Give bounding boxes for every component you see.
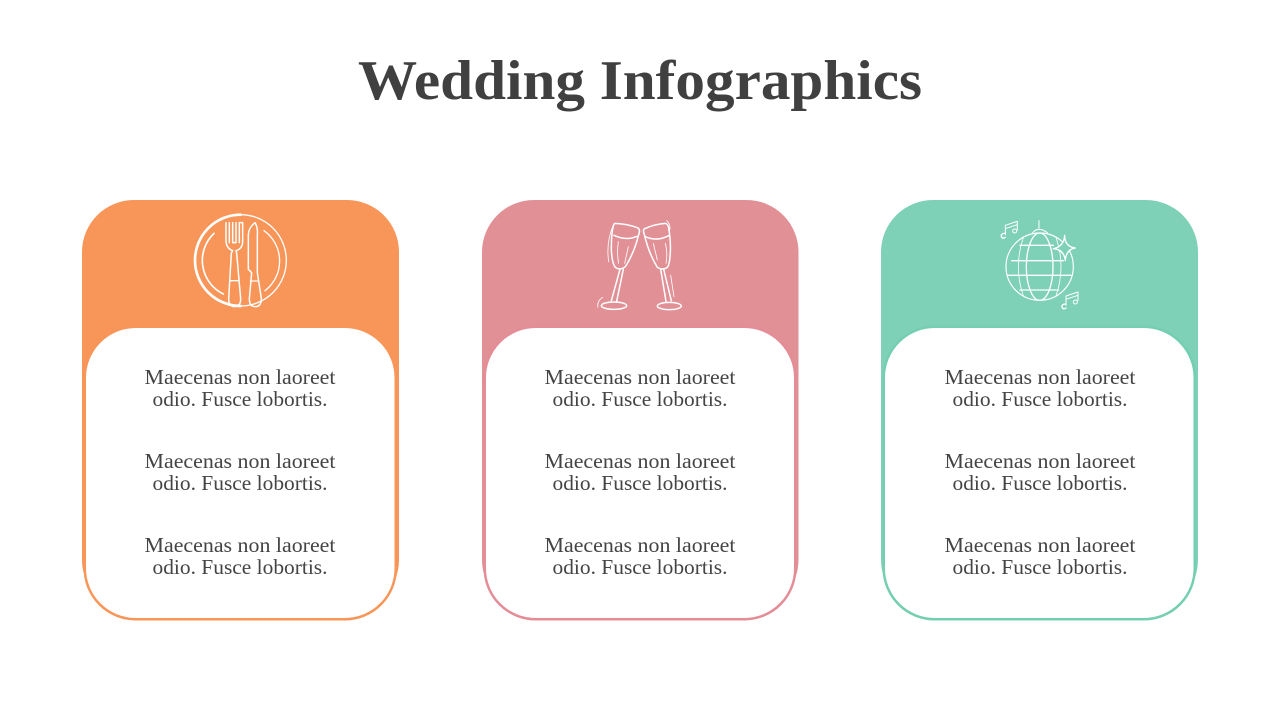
text: second item: Maecenas non laoreet xyxy=(144,449,336,473)
panel: orange card: odio. Fusce lobortis. xyxy=(152,471,328,495)
panel: pink card: odio. Fusce lobortis. xyxy=(552,471,728,495)
text: third item: Maecenas non laoreet xyxy=(944,533,1136,557)
icon: disco ball with music notes xyxy=(1001,221,1078,309)
panel: green card: odio. Fusce lobortis. xyxy=(952,387,1128,411)
icon: champagne glasses xyxy=(598,221,681,310)
card body xyxy=(884,327,1195,619)
text: first item: Maecenas non laoreet xyxy=(944,365,1136,389)
icon: plate with fork and knife xyxy=(195,215,286,307)
panel: orange card: odio. Fusce lobortis. xyxy=(152,555,328,579)
panel: pink card: odio. Fusce lobortis. xyxy=(552,555,728,579)
panel: green card: odio. Fusce lobortis. xyxy=(952,471,1128,495)
card header background xyxy=(881,200,1198,612)
text: second item: Maecenas non laoreet xyxy=(944,449,1136,473)
text: first item: Maecenas non laoreet xyxy=(144,365,336,389)
card header background xyxy=(482,200,798,612)
panel: orange card: odio. Fusce lobortis. xyxy=(152,387,328,411)
text: first item: Maecenas non laoreet xyxy=(544,365,736,389)
panel: green card xyxy=(881,200,1198,619)
card body xyxy=(85,327,396,619)
panel: pink card: odio. Fusce lobortis. xyxy=(552,387,728,411)
text: second item: Maecenas non laoreet xyxy=(544,449,736,473)
panel: green card: odio. Fusce lobortis. xyxy=(952,555,1128,579)
text: third item: Maecenas non laoreet xyxy=(144,533,336,557)
card body xyxy=(485,327,795,619)
panel: orange card xyxy=(82,200,399,619)
text: third item: Maecenas non laoreet xyxy=(544,533,736,557)
card header background xyxy=(82,200,399,612)
title: Wedding Infographics xyxy=(358,50,922,112)
panel: pink card xyxy=(482,200,798,619)
